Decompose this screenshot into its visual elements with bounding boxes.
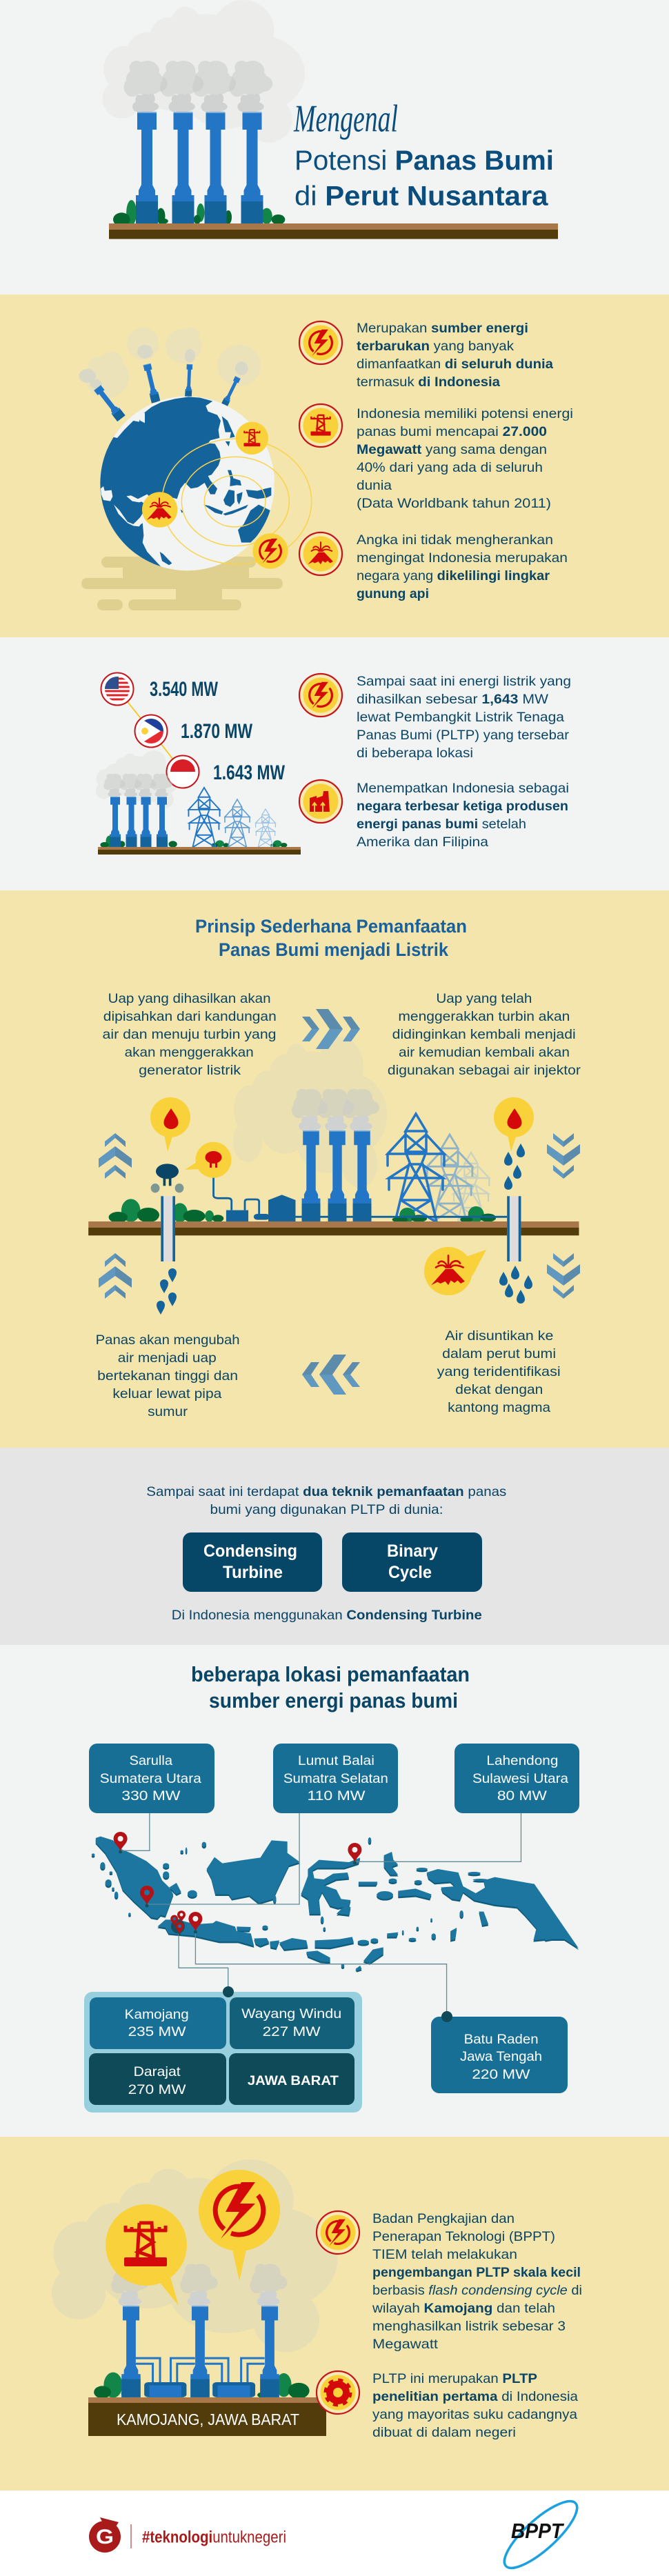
location box: Sarulla: 330 MW [121,1788,181,1804]
text block: renewable energy: terbarukan yang banyak [357,339,514,354]
text block: BPPT development: Megawatt [372,2337,439,2352]
text block: third largest producer: Menempatkan Indonesia sebagai [357,781,569,796]
text: cooling step [388,991,581,1078]
title: Potensi Panas Bumi [294,146,554,176]
callout: water drop left [150,1097,190,1152]
text block: third largest producer: Amerika dan Filipina [357,835,488,850]
cell: Jawa Barat: JAWA BARAT [248,2073,339,2088]
icon: factory badge [299,780,342,823]
icon: water drops below production pipe [157,1268,177,1315]
panel: title header [0,0,669,294]
illustration: ground strip [98,847,301,855]
text: intro: Sampai saat ini terdapat dua teknik pemanfaatan panas [146,1484,507,1499]
text: separation step: akan menggerakkan [125,1045,254,1060]
panel: two techniques [0,1448,669,1645]
text block: 27.000 megawatt: 40% dari yang ada di seluruh [357,460,543,475]
button: condensing turbine [183,1532,322,1592]
cell: Wayang Windu [230,1997,355,2049]
text block: ring of fire: gunung api [357,586,429,601]
text block: third largest producer: negara terbesar ketiga produsen [357,799,568,814]
text: heat step: sumur [148,1404,188,1419]
ground with label: KAMOJANG, JAWA BARAT [117,2410,299,2428]
map of Indonesia [92,1837,579,1973]
illustration: three chimneys [292,1089,379,1221]
location box: Sarulla [89,1744,214,1813]
text block: 27.000 megawatt: Megawatt yang sama dengan [357,442,547,457]
text: cooling step: Uap yang telah [436,991,532,1006]
location box: Lumut Balai: Sumatra Selatan [283,1771,388,1786]
cell: Jawa Barat [229,2053,355,2105]
text block: BPPT development: berbasis flash condensing cycle di [372,2283,582,2298]
icon: Indonesia flag [167,756,199,788]
title: Mengenal [293,98,398,141]
text block: BPPT development: TIEM telah melakukan [372,2247,517,2262]
illustration: pale smoke [52,2159,337,2352]
illustration: four chimneys [124,61,272,223]
icon: volcano badge [299,532,342,575]
callout: water drop right [494,1097,534,1152]
text block: third largest producer: energi panas bumi setelah [357,817,526,832]
illustration: pale smoke cloud [103,0,305,143]
text: injection step: dalam perut bumi [442,1346,556,1361]
text block: ring of fire: negara yang dikelilingi lingkar [357,568,550,583]
logo: BPPT: BPPT [511,2519,565,2543]
illustration: transmission towers [388,1114,489,1221]
text block: 27.000 megawatt: panas bumi mencapai 27.000 [357,424,547,439]
text: injection step: dekat dengan [455,1382,543,1397]
icon: rising steam [151,1164,183,1192]
text: injection step: Air disuntikan ke [445,1328,553,1344]
illustration: globe with rings and icons [90,397,312,580]
location box: Lahendong: Lahendong [486,1753,558,1768]
cell: Wayang Windu: Wayang Windu [241,2006,341,2021]
text block: 1,643 MW: Sampai saat ini energi listrik yang [357,674,571,689]
text block: 27.000 megawatt: (Data Worldbank tahun 2011) [357,496,551,511]
cell: Darajat: 270 MW [128,2082,186,2097]
arrow: chevrons right [302,1009,360,1049]
location box: Batu Raden: Jawa Tengah [460,2049,542,2064]
illustration: three chimneys [111,2264,288,2397]
heading: Prinsip Sederhana Pemanfaatan [195,916,467,937]
text: heat step: air menjadi uap [118,1350,217,1366]
icon: bolt badge [299,674,342,717]
cell: Darajat [89,2053,226,2105]
location box: Lahendong [455,1744,579,1813]
text: separation step: Uap yang dihasilkan akan [108,991,271,1006]
location box: Lumut Balai [273,1744,398,1813]
button: condensing turbine: Turbine [223,1563,283,1582]
callout: steam [185,1142,232,1178]
icon: bolt badge [299,321,342,364]
arrows: downward chevrons [547,1133,580,1299]
arrows: upward chevrons [99,1133,132,1299]
text: intro: bumi yang digunakan PLTP di dunia: [210,1502,443,1517]
logo: BPPT [496,2492,586,2576]
text: heat step: keluar lewat pipa [112,1386,222,1401]
button: binary cycle: Binary [387,1541,438,1561]
icon: bolt badge [317,2211,359,2254]
text block: 27.000 megawatt [357,406,573,511]
text block: BPPT development [372,2211,582,2352]
heading: Panas Bumi menjadi Listrik [219,939,449,960]
illustration: pale smoke [96,750,179,809]
illustration: small chimneys [103,774,172,847]
text: heat step: bertekanan tinggi dan [97,1368,238,1384]
text block: 1,643 MW: lewat Pembangkit Listrik Tenaga [357,710,564,725]
divider and hashtag: #teknologiuntuknegeri [142,2528,286,2546]
text block: renewable energy: termasuk di Indonesia [357,375,500,390]
title: di Perut Nusantara [294,181,548,211]
footer [0,2490,669,2576]
ranking figures: 1.643 MW [213,761,286,784]
illustration: ground strip [109,223,558,239]
illustration: tilted chimneys on globe [93,363,241,421]
ranking figures: 3.540 MW [150,678,218,701]
panel: country ranking [0,637,669,890]
location box: Lumut Balai: Lumut Balai [298,1753,375,1768]
text block: renewable energy [357,321,553,390]
location box: Lahendong: Sulawesi Utara [472,1771,568,1786]
text block: BPPT development: Badan Pengkajian dan [372,2211,515,2226]
text block: 27.000 megawatt: Indonesia memiliki potensi energi [357,406,573,421]
text block: ring of fire: Angka ini tidak mengherankan [357,532,553,548]
location box: Lumut Balai: 110 MW [308,1788,366,1804]
text block: 1,643 MW [357,674,571,761]
logo: Garuda G: G [96,2526,114,2548]
text block: renewable energy: Merupakan sumber energi [357,321,528,336]
illustration: pale smoke [233,1037,387,1188]
text block: third largest producer [357,781,569,850]
text block: first research plant: yang mayoritas suku cadangnya [372,2407,577,2422]
text block: BPPT development: pengembangan PLTP skala kecil [372,2265,581,2280]
text: injection step: yang teridentifikasi [437,1364,561,1379]
text block: 1,643 MW: dihasilkan sebesar 1,643 MW [357,692,549,707]
text: cooling step: air kemudian kembali akan [399,1045,570,1060]
text: cooling step: menggerakkan turbin akan [398,1009,570,1024]
heading: beberapa lokasi pemanfaatan [191,1662,470,1686]
arrow: chevrons left [302,1355,360,1395]
ground with label [88,2397,326,2436]
text: intro [146,1484,507,1517]
panel: locations map [0,1645,669,2137]
panel: Kamojang [0,2137,669,2490]
map pins [114,1832,361,1935]
text: separation step: dipisahkan dari kandungan [103,1009,277,1024]
icon: water drops falling near injection pipe [499,1144,532,1304]
button: binary cycle: Cycle [388,1563,432,1582]
button: condensing turbine: Condensing [203,1541,297,1561]
cell: Darajat: Darajat [134,2064,181,2079]
text block: 1,643 MW: di beberapa lokasi [357,746,473,761]
illustration: pipes, tanks, bushes [94,2358,310,2399]
text: separation step: air dan menuju turbin yang [102,1027,276,1042]
text block: BPPT development: wilayah Kamojang dan telah [372,2301,555,2316]
text block: first research plant: penelitian pertama di Indonesia [372,2389,578,2404]
heading [191,1662,470,1713]
text: heat step: Panas akan mengubah [96,1332,240,1348]
location box: Sarulla: Sumatera Utara [100,1771,201,1786]
text: heat step [96,1332,240,1419]
text: Indonesia technique: Di Indonesia menggunakan Condensing Turbine [172,1608,482,1623]
location box: Lahendong: 80 MW [497,1788,548,1804]
panel: renewable energy and potential [0,294,669,637]
text block: BPPT development: Penerapan Teknologi (BPPT) [372,2229,555,2244]
title [293,98,554,211]
panel: West Java group [84,1986,362,2113]
cell: Kamojang [90,1997,226,2049]
logo: Garuda G [89,2517,121,2553]
icon: gear badge [317,2371,359,2414]
text block: ring of fire [357,532,568,601]
text block: ring of fire: mengingat Indonesia merupakan [357,550,568,566]
location box: Sarulla: Sarulla [130,1753,172,1768]
text: separation step [102,991,277,1078]
ranking figures [150,678,286,784]
text: injection step: kantong magma [448,1400,550,1415]
illustration: bushes [113,200,285,226]
text block: 27.000 megawatt: dunia [357,478,392,493]
location box: Batu Raden: 220 MW [472,2067,530,2082]
illustration: bushes [100,836,287,848]
icon: USA flag [101,673,134,705]
cell: Wayang Windu: 227 MW [263,2024,321,2039]
connector lines [121,1745,521,2017]
illustration: smoke above globe chimneys [79,328,260,398]
callout: tower [106,2204,187,2306]
text: separation step: generator listrik [139,1063,241,1078]
location box: Batu Raden [431,2011,568,2093]
text block: renewable energy: dimanfaatkan di seluruh dunia [357,357,553,372]
callout: volcano [424,1247,486,1295]
illustration: transmission towers [188,788,275,847]
panel: simple principle of geothermal to electricity [0,890,669,1448]
icon: tower badge [299,404,342,447]
heading: sumber energi panas bumi [209,1688,458,1713]
text block: 1,643 MW: Panas Bumi (PLTP) yang tersebar [357,728,570,743]
icon: Philippines flag [135,715,167,748]
illustration: process plant, pipes, bushes and ground [88,1177,579,1261]
text block: first research plant: PLTP ini merupakan PLTP [372,2371,537,2386]
cell: Kamojang: 235 MW [128,2024,186,2039]
heading [195,916,467,960]
text: injection step [437,1328,561,1415]
text: cooling step: digunakan sebagai air injektor [388,1063,581,1078]
illustration: globe shadow [81,557,283,610]
connector dot [223,1986,234,1997]
text block: BPPT development: menghasilkan listrik sebesar 3 [372,2319,566,2334]
connector: ranking line [117,689,183,772]
text block: first research plant: dibuat di dalam negeri [372,2425,516,2440]
callout: bolt [199,2170,280,2281]
text block: first research plant [372,2371,578,2440]
text: cooling step: didinginkan kembali menjadi [392,1027,576,1042]
cell: Kamojang: Kamojang [125,2007,189,2022]
location box: Batu Raden: Batu Raden [464,2032,539,2047]
ranking figures: 1.870 MW [181,720,253,743]
button: binary cycle [342,1532,482,1592]
